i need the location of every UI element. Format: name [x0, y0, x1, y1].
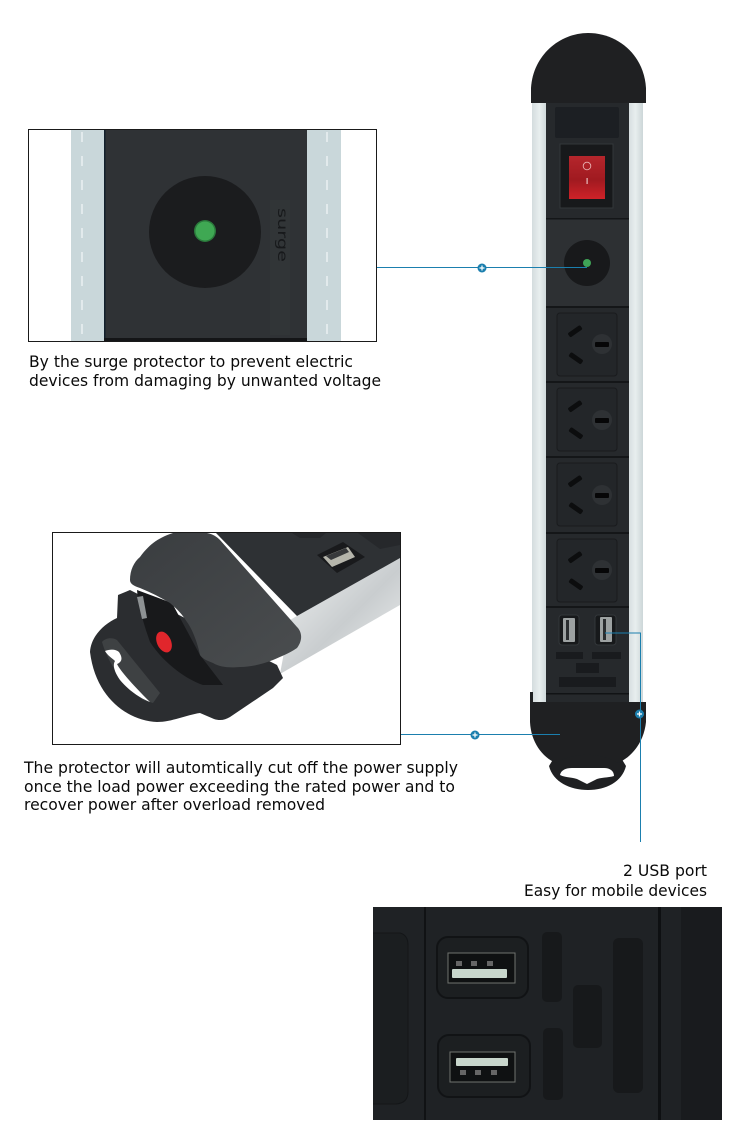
green LED — [194, 220, 216, 242]
caption: surge protector — [29, 352, 381, 390]
top end cap — [531, 33, 646, 103]
caption: surge protector: devices from damaging by unwanted voltage — [29, 371, 381, 390]
caption: overload protector: once the load power exceeding the rated power and to — [24, 777, 455, 796]
panel: surge indicator close-up — [28, 130, 376, 342]
blacked-out marking blocks — [542, 932, 643, 1100]
black top panel — [216, 533, 400, 616]
caption: USB port: Easy for mobile devices — [524, 881, 707, 900]
top end cap — [130, 533, 301, 667]
dark indicator recess — [149, 176, 261, 288]
rocker switch — [560, 144, 613, 208]
caption: surge protector: By the surge protector to prevent electric — [29, 352, 353, 371]
bottom end cap with handle — [530, 692, 646, 790]
callout line: overload protector — [401, 730, 560, 740]
panel: USB port close-up — [373, 907, 722, 1120]
callout line: surge indicator — [377, 264, 587, 272]
caption: overload protector: The protector will automtically cut off the power supply — [23, 758, 458, 777]
socket 3 — [546, 463, 629, 534]
caption: overload protector — [23, 758, 458, 814]
socket 4 — [546, 539, 629, 608]
power strip product — [530, 33, 646, 790]
upper USB port — [437, 937, 528, 998]
handle slot — [102, 638, 160, 703]
socket 2 — [546, 388, 629, 458]
display window — [555, 107, 619, 138]
panel: overload protector close-up — [52, 532, 400, 744]
callout line: USB port — [605, 633, 644, 842]
lower USB port — [438, 1035, 530, 1097]
USB module on strip — [546, 615, 629, 694]
USB port on panel — [317, 542, 365, 573]
surge label on module: surge — [274, 208, 289, 262]
red reset button — [156, 632, 172, 652]
lower handle — [90, 590, 283, 722]
caption: overload protector: recover power after overload removed — [24, 795, 325, 814]
aluminium rails — [532, 100, 643, 704]
caption: USB port: 2 USB port — [623, 861, 707, 880]
socket 1 — [546, 313, 629, 383]
surge indicator module — [546, 218, 629, 308]
caption: USB port — [524, 861, 707, 900]
silver rail — [280, 556, 400, 674]
recessed button area — [137, 590, 223, 685]
black centre body — [546, 100, 629, 704]
